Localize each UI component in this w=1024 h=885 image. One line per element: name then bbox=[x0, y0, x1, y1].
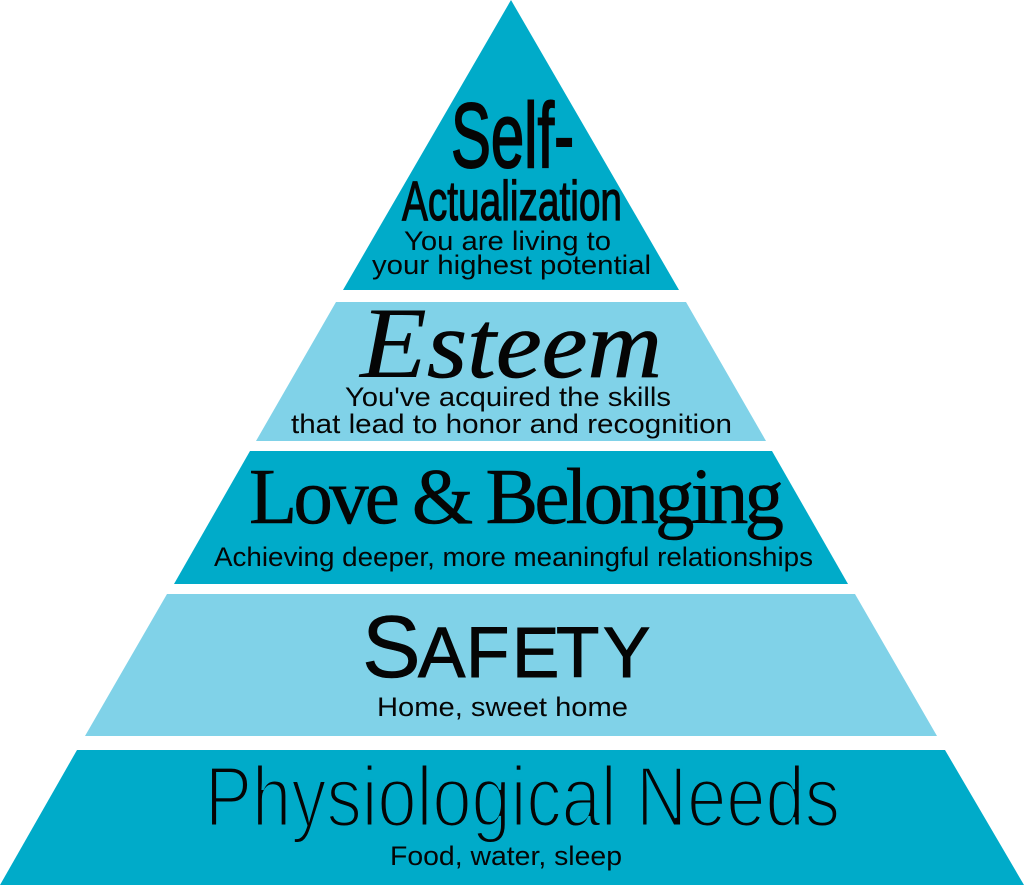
tier: love and belonging bbox=[174, 451, 848, 584]
heading: Physiological Needs: Physiological Needs bbox=[205, 750, 840, 845]
description: esteem line 1: You've acquired the skills bbox=[345, 382, 671, 412]
heading: Actualization: Actualization bbox=[402, 169, 622, 232]
description: self-actualization line 2: your highest potential bbox=[372, 250, 651, 280]
description: love and belonging: Achieving deeper, more meaningful relationships bbox=[214, 542, 813, 572]
heading: Love & Belonging: Love & Belonging bbox=[249, 454, 784, 541]
description: self-actualization line 1: You are living to bbox=[404, 226, 611, 256]
description: esteem line 2: that lead to honor and recognition bbox=[291, 409, 732, 439]
description: safety: Home, sweet home bbox=[377, 692, 628, 722]
description: physiological needs: Food, water, sleep bbox=[390, 841, 622, 871]
tier: esteem bbox=[256, 287, 766, 441]
tier: safety bbox=[85, 594, 937, 736]
tier: self-actualization bbox=[343, 0, 679, 290]
heading: Self-: Self- bbox=[451, 85, 574, 187]
tier: physiological needs bbox=[0, 750, 1024, 885]
heading: Safety: S bbox=[362, 597, 421, 696]
heading: Esteem: Esteem bbox=[358, 287, 662, 400]
heading: Safety: AFETY bbox=[418, 614, 650, 693]
